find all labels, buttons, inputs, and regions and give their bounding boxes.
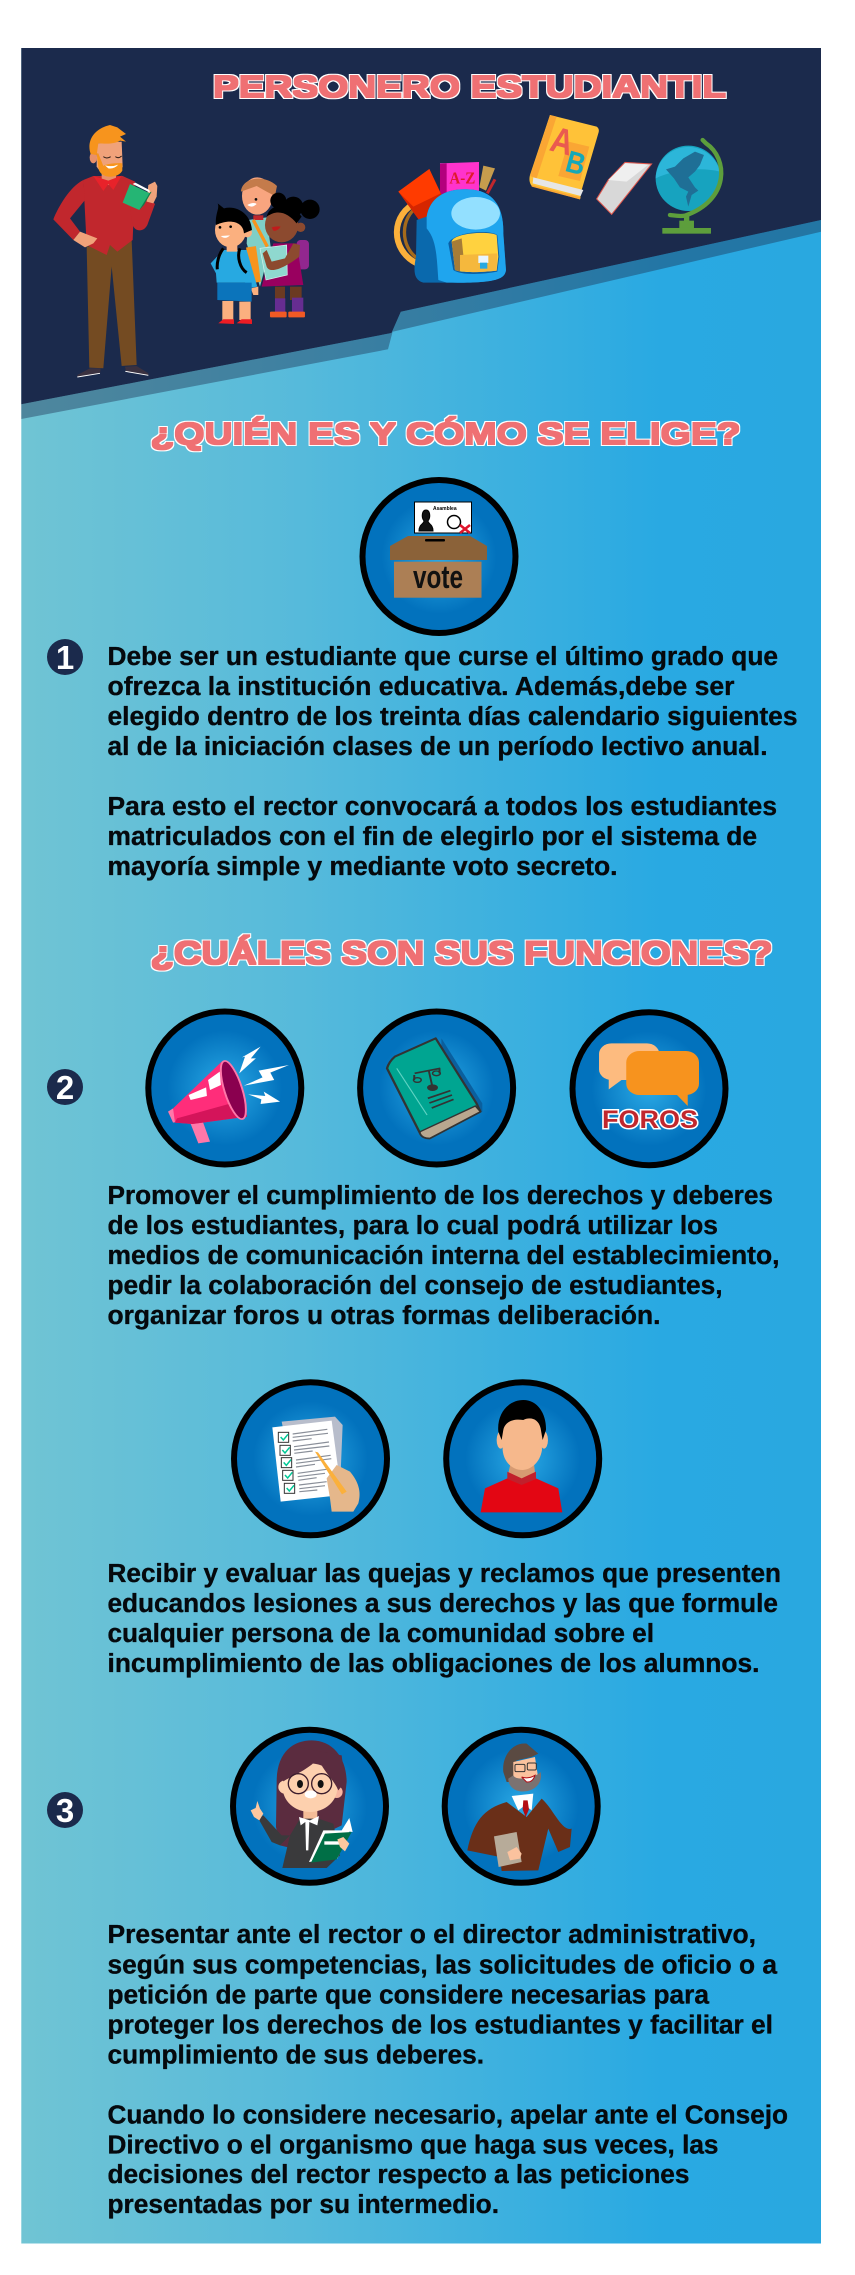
text block: requirements: elegido dentro de los treinta días calendario siguientes (108, 703, 798, 731)
icon: A B book: A (546, 120, 578, 164)
icon: group of three school children (211, 177, 320, 324)
text block: promote rights: de los estudiantes, para lo cual podrá utilizar los (108, 1212, 718, 1240)
icon: checklist and hand circle (234, 1382, 387, 1535)
text block: present requests: cumplimiento de sus deberes. (108, 2042, 484, 2070)
text block: promote rights: Promover el cumplimiento de los derechos y deberes (108, 1182, 773, 1210)
header diagonal band (21, 220, 821, 419)
text block: present requests: petición de parte que considere necesarias para (108, 1982, 710, 2010)
number badge 2: 2 (56, 1069, 74, 1106)
text block: present requests: proteger los derechos de los estudiantes y facilitar el (108, 2012, 773, 2040)
icon: forum speech bubbles circle (572, 1012, 726, 1165)
number badge 1 (47, 639, 83, 676)
text block: present requests: presentadas por su intermedio. (108, 2191, 499, 2219)
text block: promote rights: organizar foros u otras formas deliberación. (108, 1302, 660, 1330)
text block: present requests: decisiones del rector respecto a las peticiones (108, 2161, 690, 2189)
text block: requirements: ofrezca la institución educativa. Además,debe ser (108, 673, 735, 701)
number badge 2 (47, 1069, 83, 1106)
icon: A B book (529, 115, 599, 199)
icon: A B book: B (562, 145, 589, 183)
text block: complaints: Recibir y evaluar las quejas y reclamos que presenten (108, 1560, 781, 1588)
text block: promote rights: pedir la colaboración del consejo de estudiantes, (108, 1272, 722, 1300)
icon: bearded man circle (445, 1730, 598, 1883)
text block: requirements: Debe ser un estudiante que curse el último grado que (108, 643, 778, 671)
text block: present requests: Presentar ante el rector o el director administrativo, (108, 1921, 756, 1949)
icon: woman with glasses circle (233, 1730, 386, 1883)
text block: complaints (108, 1560, 781, 1678)
number badge 3 (47, 1792, 83, 1829)
icon: backpack with books: A-Z (449, 168, 475, 187)
icon: ballot box circle (362, 480, 516, 633)
forum label: FOROS (602, 1106, 698, 1134)
text block: present requests: Directivo o el organismo que haga sus veces, las (108, 2132, 718, 2160)
title: PERSONERO ESTUDIANTIL (213, 69, 726, 104)
text block: requirements: mayoría simple y mediante voto secreto. (108, 853, 618, 881)
text block: complaints: incumplimiento de las obligaciones de los alumnos. (108, 1650, 760, 1678)
icon: backpack with books (397, 162, 506, 283)
text block: complaints: cualquier persona de la comunidad sobre el (108, 1620, 654, 1648)
text block: present requests (108, 1921, 788, 2219)
icon: ballot box circle: Asamblea (433, 506, 457, 512)
icon: open book (597, 162, 652, 214)
text block: complaints: educandos lesiones a sus derechos y las que formule (108, 1590, 778, 1618)
heading: ¿Quién es y cómo se elige?: ¿QUIÉN ES Y CÓMO SE ELIGE? (150, 415, 740, 451)
text block: promote rights (108, 1182, 779, 1330)
text block: requirements: matriculados con el fin de elegirlo por el sistema de (108, 823, 757, 851)
text block: present requests: según sus competencias, las solicitudes de oficio o a (108, 1952, 778, 1980)
vote label: vote (413, 559, 463, 595)
text block: promote rights: medios de comunicación interna del establecimiento, (108, 1242, 779, 1270)
panel: dark header shape (21, 48, 821, 404)
text block: requirements: Para esto el rector convocará a todos los estudiantes (108, 793, 777, 821)
icon: globe (656, 140, 721, 234)
icon: law book circle (360, 1012, 513, 1164)
icon: teacher reading a book (53, 125, 157, 377)
text block: requirements (108, 643, 798, 881)
text block: requirements: al de la iniciación clases de un período lectivo anual. (108, 733, 768, 761)
number badge 3: 3 (56, 1792, 74, 1829)
icon: megaphone circle (148, 1012, 301, 1164)
heading: ¿Cuáles son sus funciones?: ¿CUÁLES SON SUS FUNCIONES? (150, 935, 772, 971)
text block: present requests: Cuando lo considere necesario, apelar ante el Consejo (108, 2102, 788, 2130)
number badge 1: 1 (56, 639, 74, 676)
icon: person avatar circle (446, 1382, 599, 1535)
